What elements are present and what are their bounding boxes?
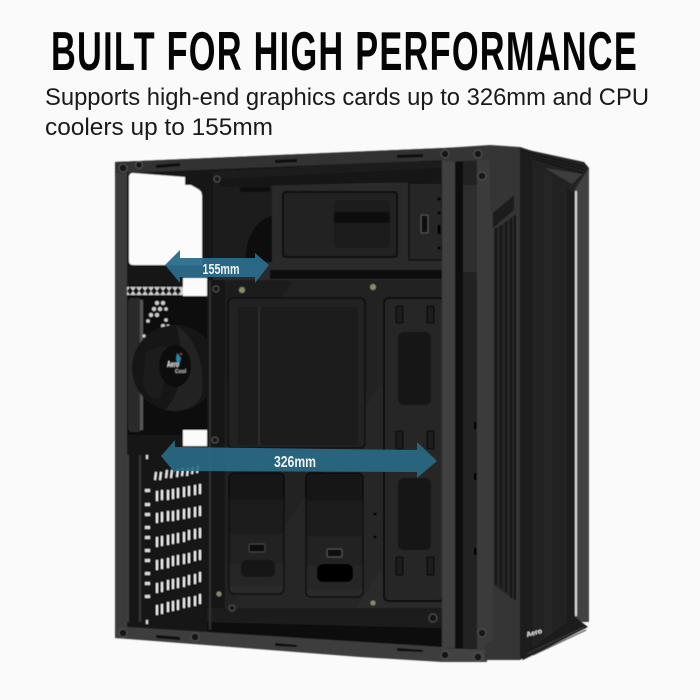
subtitle (45, 84, 649, 141)
rear mesh and fan (126, 265, 218, 435)
case logo: Aero (526, 628, 543, 639)
subtitle: coolers up to 155mm (45, 114, 273, 141)
front vents (494, 215, 515, 600)
rear pci area (127, 430, 207, 627)
right tray panel (374, 298, 444, 601)
psu cutout (129, 173, 202, 265)
arrow: 326mm (161, 440, 437, 478)
fan hub and logo: Aero (167, 360, 179, 369)
pci slits (155, 466, 200, 615)
motherboard tray (207, 280, 444, 648)
lower tray panel middle (306, 473, 363, 597)
top vent (519, 148, 589, 192)
top drive shelf area (207, 160, 442, 280)
fan hub and logo: Cool (175, 369, 187, 375)
arrow: 155mm: 155mm (202, 261, 240, 278)
front pillar and panel (442, 145, 520, 662)
upper tray panel (228, 298, 365, 448)
brass standoffs (216, 284, 376, 606)
lower tray panel left (229, 473, 284, 594)
arrow: 155mm (165, 250, 269, 283)
pc case (115, 145, 589, 662)
fan hub and logo (159, 345, 191, 387)
bottom vent (520, 617, 588, 660)
arrow: 326mm: 326mm (274, 454, 316, 471)
case frame (115, 148, 445, 662)
fan (127, 296, 218, 435)
subtitle: Supports high-end graphics cards up to 326mm and CPU (45, 84, 649, 111)
case interior (115, 146, 490, 660)
screws (119, 150, 486, 661)
side panel (519, 147, 589, 660)
